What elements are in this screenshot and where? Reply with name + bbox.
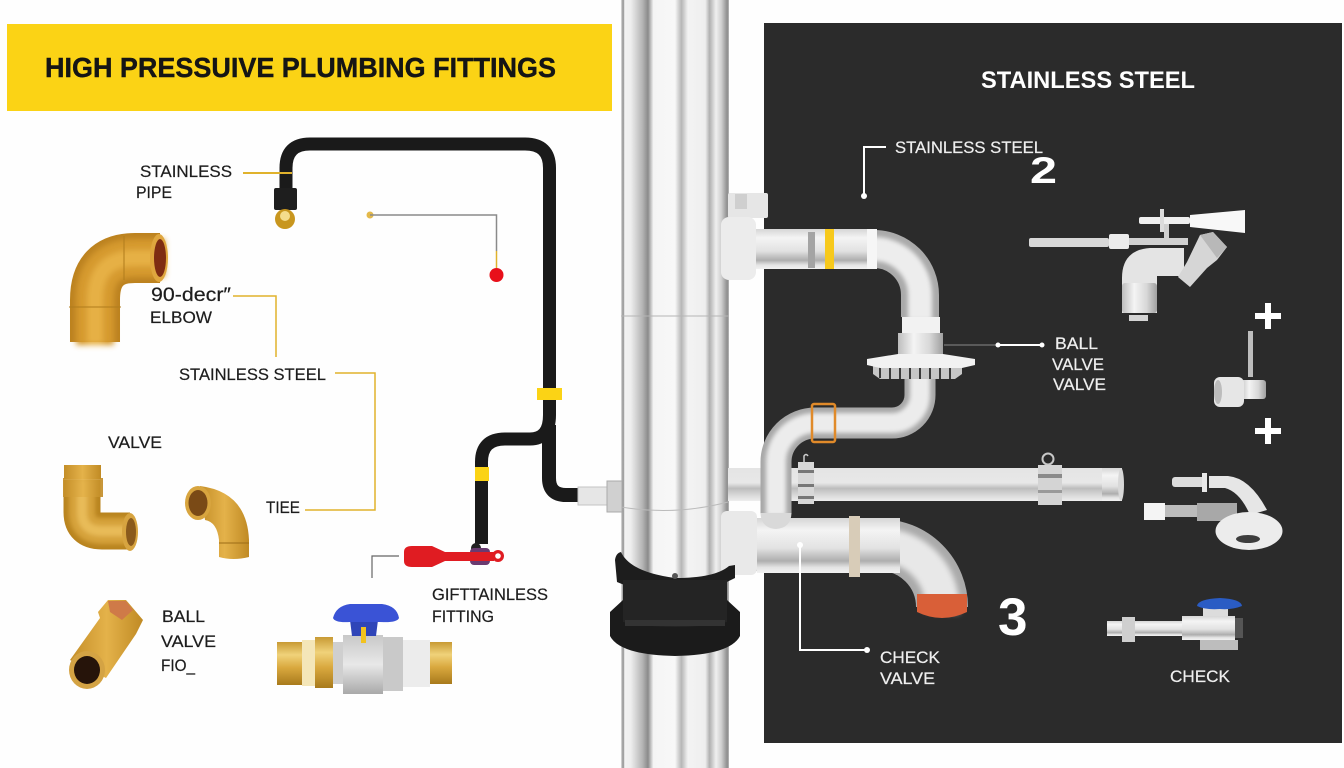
label: 90-degree elbow [150, 285, 276, 357]
label: stainless pipe: PIPE [136, 184, 172, 202]
steel pipework on dark panel [721, 193, 1124, 618]
label: stainless pipe [136, 163, 292, 202]
label: ball valve fio [161, 608, 216, 675]
icon: brass elbow large [69, 234, 168, 345]
title banner: HIGH PRESSUIVE PLUMBING FITTINGS [45, 52, 556, 83]
icon: brass elbow small right [185, 486, 249, 559]
label: stainless steel top callout: STAINLESS STEEL [895, 139, 1043, 157]
label: stainless steel [179, 366, 375, 510]
icon: top right valve [1029, 209, 1245, 321]
flange [867, 317, 975, 379]
label: check valve callout: VALVE [880, 670, 935, 688]
label: fitting [432, 586, 548, 626]
number 3: 3 [998, 588, 1027, 647]
icon: plus upper [1255, 303, 1281, 329]
icon: small valve [1214, 331, 1266, 407]
label: ball valve fio: BALL [162, 608, 205, 626]
icon: plus lower [1255, 418, 1281, 444]
label: check valve callout [797, 542, 940, 688]
yellow pipe band top [537, 388, 562, 400]
icon: check valve blue handle [1107, 598, 1243, 650]
label: ball valve valve [944, 335, 1106, 394]
icon: brass elbow small left [63, 465, 138, 551]
icon: blue handle ball valve [277, 604, 452, 694]
clamp right [1038, 454, 1062, 505]
label: ball valve valve: VALVE [1052, 356, 1104, 374]
label: ball valve fio: FIO_ [161, 657, 196, 675]
central vertical steel column [621, 0, 729, 768]
label: stainless pipe: STAINLESS [140, 163, 232, 181]
callout: red marker [366, 212, 504, 282]
icon: flanged valve right [1144, 473, 1282, 550]
panel: dark stainless steel panel [764, 23, 1342, 743]
clamp left [798, 454, 814, 504]
number 2: 2 [1030, 150, 1057, 191]
pipe connector to column [578, 481, 622, 512]
label: tiee: TIEE [266, 499, 300, 517]
title banner [7, 24, 612, 111]
label: stainless steel top callout [861, 139, 1043, 199]
label: check valve callout: CHECK [880, 649, 940, 667]
label: valve: VALVE [108, 434, 162, 452]
top bent pipe [721, 193, 920, 320]
second bend pipe [760, 372, 920, 529]
label: fitting: FITTING [432, 608, 494, 626]
label: ball valve valve: VALVE [1053, 376, 1106, 394]
yellow pipe band lower [475, 467, 489, 481]
label: check: CHECK [1170, 668, 1230, 686]
lower elbow pipe [721, 511, 967, 618]
label: fitting: GIFTTAINLESS [432, 586, 548, 604]
label: 90-degree elbow: 90-decr″ [151, 285, 231, 306]
icon: brass pipe fitting [69, 600, 143, 689]
label: stainless steel: STAINLESS STEEL [179, 366, 326, 384]
label: ball valve valve: BALL [1055, 335, 1098, 353]
heading: stainless steel: STAINLESS STEEL [981, 67, 1195, 94]
icon: red handle valve [372, 543, 504, 578]
pipe end nozzle [274, 188, 297, 229]
collar on column [610, 552, 740, 656]
long horizontal pipe [728, 454, 1124, 505]
label: ball valve fio: VALVE [161, 633, 216, 651]
label: 90-degree elbow: ELBOW [150, 309, 212, 327]
black pipe system [274, 144, 622, 544]
